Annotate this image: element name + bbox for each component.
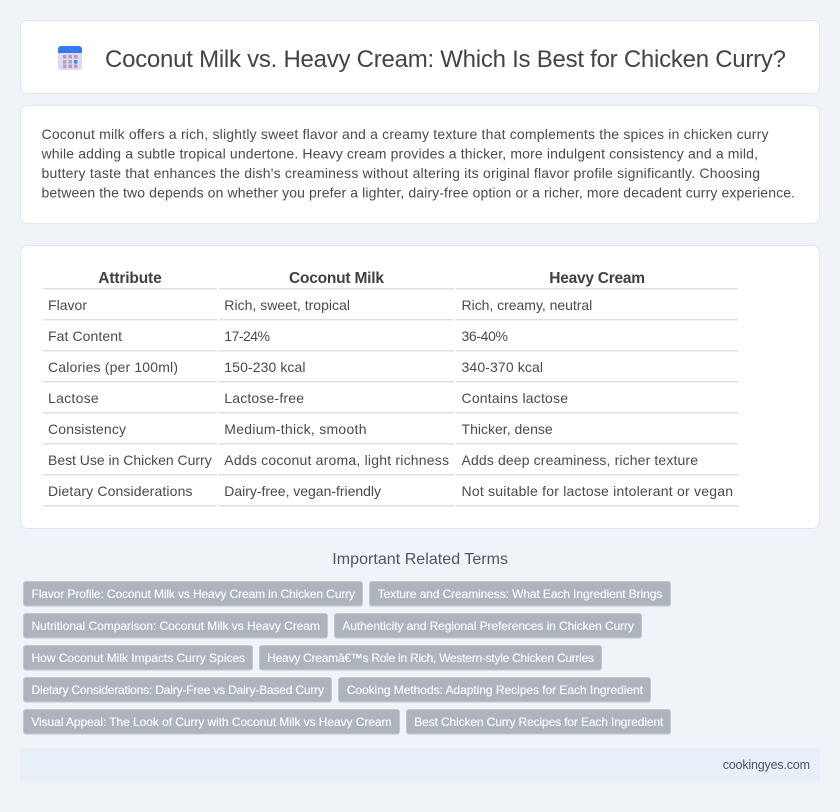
table row: calories: 340-370 kcal — [462, 359, 543, 375]
tag: visual appeal — [24, 710, 400, 734]
tag: curry spices — [24, 646, 252, 670]
panel: title header — [20, 20, 820, 94]
table row: flavor: Rich, sweet, tropical — [224, 297, 350, 313]
table row: consistency: Medium-thick, smooth — [224, 421, 366, 437]
table row: dietary considerations: Not suitable for lactose intolerant or vegan — [462, 483, 733, 499]
table row: best use — [43, 452, 738, 476]
table row: best use: Adds deep creaminess, richer texture — [462, 452, 698, 468]
tag: curry spices: How Coconut Milk Impacts Curry Spices — [32, 651, 245, 665]
text block: introduction paragraph — [40, 126, 795, 200]
table row: calories: 150-230 kcal — [224, 359, 306, 375]
tag: nutritional comparison: Nutritional Comparison: Coconut Milk vs Heavy Cream — [32, 619, 320, 633]
tag: cooking methods — [338, 678, 650, 702]
table row: best use: Adds coconut aroma, light richness — [224, 452, 449, 468]
table header row — [43, 270, 738, 290]
table row: best use: Best Use in Chicken Curry — [48, 452, 212, 468]
heading: important related terms: Important Related Terms — [332, 551, 508, 568]
panel: related term tags — [24, 582, 670, 734]
text block: introduction paragraph: Coconut milk offers a rich, slightly sweet flavor and a creamy texture that complements the spices in chicken curry — [42, 126, 768, 142]
panel: comparison table — [20, 246, 820, 528]
text block: introduction paragraph: while adding a subtle tropical undertone. Heavy cream provides a thicker, more indulgent consistency and a mild, — [40, 146, 758, 162]
table row: lactose — [43, 390, 738, 414]
tag: flavor profile — [24, 582, 362, 606]
footer: source credit — [20, 748, 820, 782]
table row: fat content: 36-40% — [462, 328, 508, 344]
table header row: Heavy Cream — [549, 270, 645, 287]
tag: dietary considerations: Dietary Considerations: Dairy-Free vs Dairy-Based Curry — [32, 683, 324, 697]
panel: introduction text — [20, 106, 820, 224]
tag: dietary considerations — [24, 678, 332, 702]
table row: consistency: Consistency — [48, 421, 126, 437]
tag: texture and creaminess — [370, 582, 670, 606]
text block: introduction paragraph: buttery taste that enhances the dish's creaminess without altering its original flavor profile significantly. Choosing — [42, 165, 760, 181]
tag: visual appeal: Visual Appeal: The Look of Curry with Coconut Milk vs Heavy Cream — [31, 715, 392, 729]
table row: dietary considerations: Dairy-free, vegan-friendly — [224, 483, 381, 499]
table row: fat content — [43, 328, 738, 352]
table row: dietary considerations: Dietary Considerations — [48, 483, 192, 499]
table row: lactose: Lactose — [48, 390, 99, 406]
tag: best recipes — [406, 710, 670, 734]
tag: heavy cream role — [260, 646, 602, 670]
table row: consistency — [43, 421, 738, 444]
icon: calendar — [58, 46, 82, 70]
table header row: Attribute — [98, 270, 162, 287]
tag: best recipes: Best Chicken Curry Recipes for Each Ingredient — [414, 715, 664, 729]
tag: authenticity: Authenticity and Regional Preferences in Chicken Curry — [342, 619, 634, 633]
footer: source credit: cookingyes.com — [723, 758, 810, 772]
tag: authenticity — [334, 614, 642, 638]
table header row: Coconut Milk — [289, 270, 384, 287]
table row: calories — [43, 359, 738, 382]
table row: lactose: Contains lactose — [462, 390, 568, 406]
tag: nutritional comparison — [24, 614, 328, 638]
title: Coconut Milk vs. Heavy Cream: Which Is Best for Chicken Curry? — [105, 46, 786, 73]
text block: introduction paragraph: between the two depends on whether you prefer a lighter, dairy-free option or a richer, more decadent curry experience. — [42, 184, 795, 200]
table row: flavor: Flavor — [48, 297, 87, 313]
table row: fat content: 17-24% — [224, 328, 270, 344]
tag: cooking methods: Cooking Methods: Adapting Recipes for Each Ingredient — [347, 683, 644, 697]
tag: flavor profile: Flavor Profile: Coconut Milk vs Heavy Cream in Chicken Curry — [32, 587, 355, 601]
table row: fat content: Fat Content — [48, 328, 122, 344]
tag: heavy cream role: Heavy Creamâ€™s Role in Rich, Western-style Chicken Curries — [267, 651, 594, 665]
table row: dietary considerations — [43, 483, 738, 506]
table row: calories: Calories (per 100ml) — [48, 359, 178, 375]
table row: flavor: Rich, creamy, neutral — [462, 297, 592, 313]
table row: lactose: Lactose-free — [224, 390, 304, 406]
table row: consistency: Thicker, dense — [462, 421, 553, 437]
tag: texture and creaminess: Texture and Creaminess: What Each Ingredient Brings — [378, 587, 662, 601]
table row: flavor — [43, 297, 738, 320]
